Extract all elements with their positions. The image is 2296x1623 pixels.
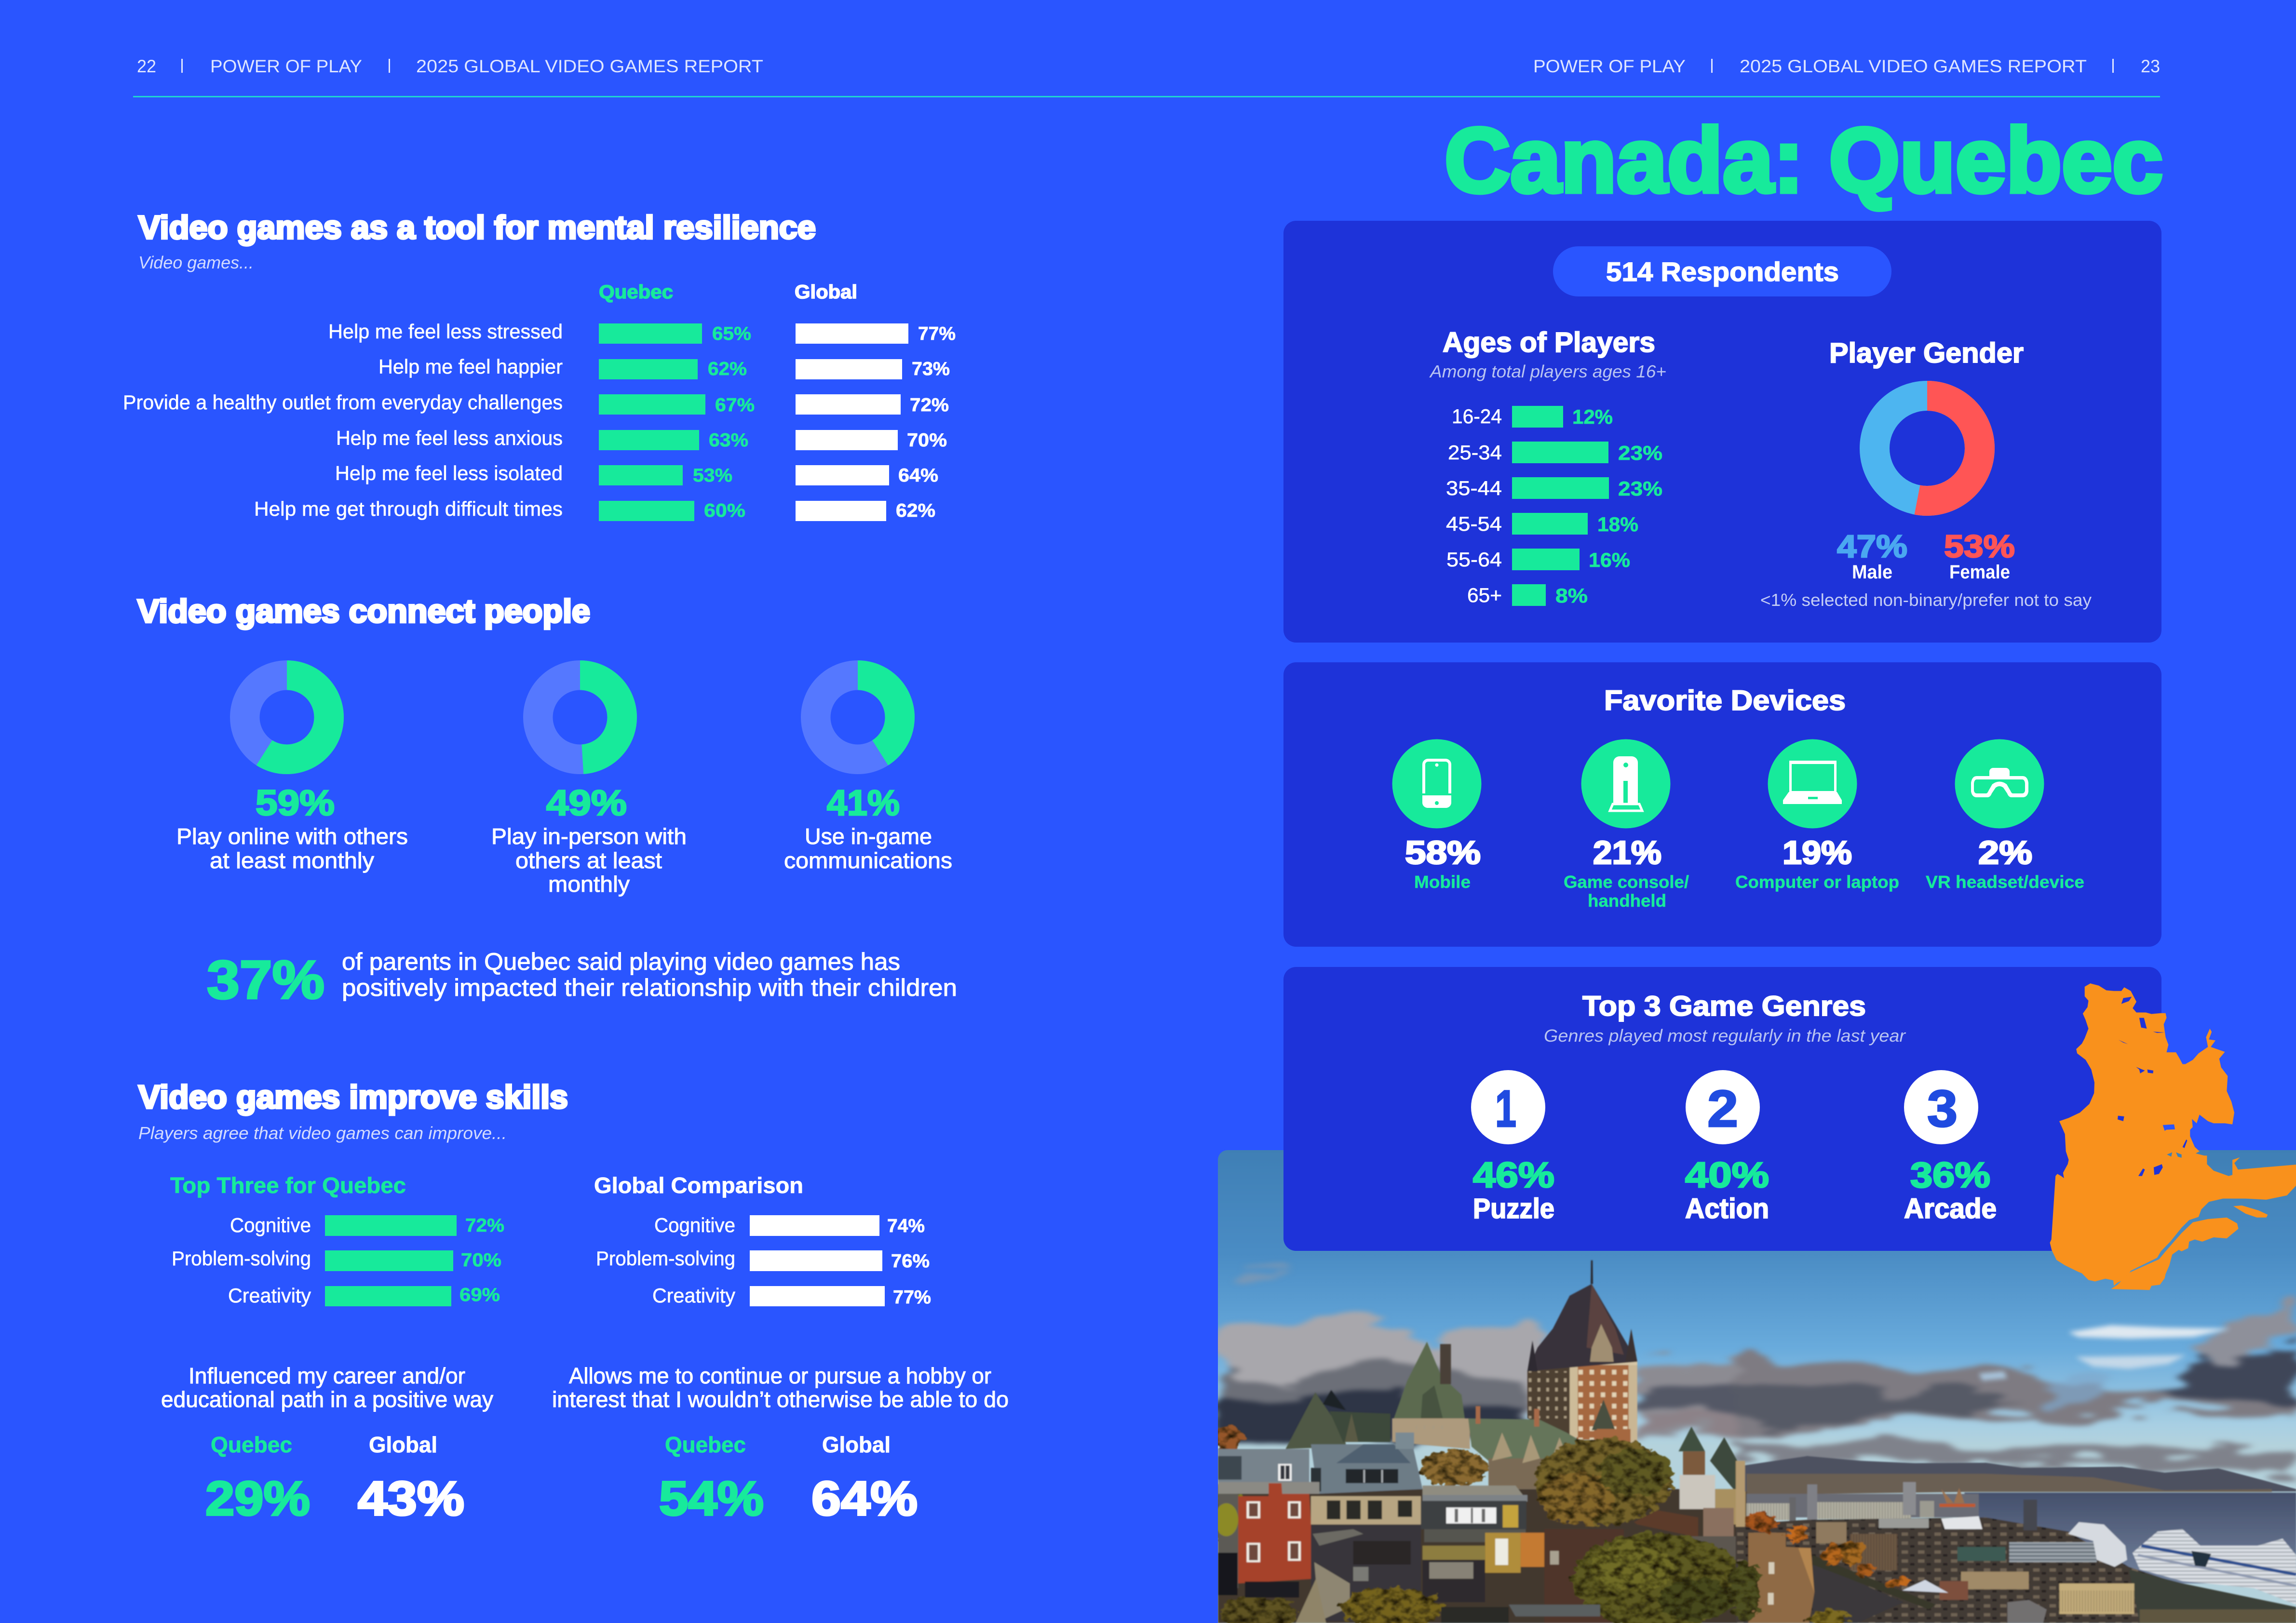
stat: console: Game console/ — [1564, 872, 1689, 892]
stat: hobby or interest: Quebec — [665, 1432, 746, 1457]
stat: career influence: Quebec — [211, 1432, 292, 1457]
chart: top three for Quebec: Top Three for Quebec — [170, 1173, 406, 1198]
stat: VR — [1926, 834, 2084, 892]
left part of the photo — [1209, 1261, 1748, 1623]
callout: 37% of parents: positively impacted their relationship with their children — [342, 974, 957, 1001]
bar chart: ages: 35-44 — [1446, 477, 1502, 499]
chart: global comparison: Global Comparison — [594, 1173, 803, 1198]
stat: console — [1564, 834, 1689, 911]
chart: global comparison: 74% — [887, 1216, 925, 1236]
row: less anxious: 70% — [907, 430, 947, 451]
heading: connect people: Video games connect people — [137, 593, 590, 630]
chart: top three for Quebec: 69% — [459, 1285, 500, 1305]
genre 1: puzzle: Puzzle — [1473, 1193, 1554, 1224]
icon: laptop — [1768, 739, 1857, 828]
stat: mobile: 58% — [1405, 834, 1481, 871]
right part of the photo — [1729, 1456, 2296, 1623]
row: less anxious — [336, 427, 947, 451]
stat: 41%: communications — [784, 848, 952, 873]
stat: career influence — [161, 1363, 493, 1526]
stat: hobby or interest: interest that I wouldn’t otherwise be able to do — [552, 1387, 1009, 1412]
genre 3: arcade: 3 — [1927, 1079, 1958, 1138]
genre 1: puzzle: 46% — [1473, 1155, 1554, 1195]
panel: respondents, ages and gender — [1283, 221, 2161, 643]
bar chart: ages: 8% — [1555, 584, 1588, 607]
row: happier: 73% — [912, 359, 950, 379]
header: right page: POWER OF PLAY — [1533, 56, 1686, 76]
genre 3: arcade: Arcade — [1904, 1193, 1997, 1224]
genre 2: action: Action — [1685, 1193, 1769, 1224]
row: less isolated: 64% — [898, 465, 938, 486]
stat: VR: VR headset/device — [1926, 872, 2084, 892]
stat: 41%: Use in-game — [805, 824, 932, 849]
callout: 37% of parents — [207, 948, 957, 1010]
stat: computer: Computer or laptop — [1735, 872, 1899, 892]
stat: 59%: 59% — [256, 783, 335, 823]
stat: hobby or interest — [552, 1363, 1009, 1526]
stat: career influence: educational path in a positive way — [161, 1387, 493, 1412]
chart: global comparison: Problem-solving — [596, 1247, 735, 1270]
stat: career influence: 29% — [205, 1472, 310, 1526]
header: right page: 23 — [2141, 56, 2160, 76]
row: happier: Help me feel happier — [378, 355, 563, 378]
donut: 59% play online — [245, 675, 329, 759]
icon: phone — [1392, 739, 1481, 828]
row: less stressed: 77% — [918, 323, 956, 344]
header: left page: 2025 GLOBAL VIDEO GAMES REPORT — [416, 56, 763, 76]
stat: 59% — [176, 783, 408, 873]
bar chart: ages: 23% — [1618, 442, 1662, 464]
heading: improve skills: Video games improve skills — [138, 1079, 568, 1115]
pill: 514 respondents — [1553, 246, 1891, 296]
row: less isolated: Help me feel less isolated — [335, 462, 563, 484]
note: genres played: Genres played most regularly in the last year — [1544, 1026, 1906, 1046]
header: right page: 2025 GLOBAL VIDEO GAMES REPORT — [1740, 56, 2087, 76]
photo: Quebec City skyline with Chateau Frontenac — [1209, 1150, 2296, 1623]
genre 2: action — [1685, 1070, 1769, 1224]
chart: global comparison — [594, 1173, 931, 1308]
header rule — [133, 96, 2160, 97]
panel: favorite devices — [1283, 662, 2161, 947]
bar chart: ages: 45-54 — [1446, 512, 1502, 535]
map: Quebec province in orange — [2050, 983, 2296, 1290]
stat: console: handheld — [1588, 891, 1666, 911]
stat: computer: 19% — [1783, 834, 1852, 871]
row: difficult times: Help me get through difficult times — [254, 497, 563, 520]
donut: 49% play in person — [538, 675, 622, 759]
genre 3: arcade — [1904, 1070, 1997, 1224]
heading: mental resilience: Video games as a tool for mental resilience — [138, 209, 816, 246]
bar chart: ages: 18% — [1597, 513, 1638, 536]
chart: top three for Quebec: Creativity — [228, 1284, 311, 1307]
chart: top three for Quebec: 70% — [461, 1250, 501, 1271]
icon: game console — [1581, 739, 1670, 828]
stat: career influence: Global — [369, 1432, 437, 1457]
row: less stressed — [328, 320, 956, 344]
stat: male: 47% — [1837, 528, 1907, 564]
icon: VR headset — [1955, 739, 2044, 828]
row: difficult times: 60% — [704, 500, 745, 521]
bar chart: ages: 65+ — [1467, 584, 1502, 606]
chart: top three for Quebec — [170, 1173, 504, 1307]
callout: 37% of parents: 37% — [207, 950, 324, 1010]
heading: ages of players: Ages of Players — [1443, 327, 1655, 358]
row: healthy outlet — [123, 391, 949, 416]
chart: global comparison: Creativity — [652, 1284, 735, 1307]
subheading: Players agree that video games can improve... — [138, 1123, 507, 1143]
panel: top 3 game genres — [1283, 967, 2161, 1251]
column header: Global: Global — [795, 282, 857, 303]
callout: 37% of parents: of parents in Quebec said playing video games has — [342, 948, 900, 975]
stat: career influence: Influenced my career and/or — [189, 1363, 465, 1388]
stat: hobby or interest: Global — [822, 1432, 891, 1457]
header: right page — [1533, 56, 2160, 76]
stat: 41% — [784, 783, 952, 873]
chart: global comparison: Cognitive — [654, 1214, 735, 1236]
column header: Quebec: Quebec — [599, 282, 673, 303]
genre 1: puzzle — [1471, 1070, 1554, 1224]
stat: hobby or interest: 64% — [811, 1472, 918, 1526]
row: healthy outlet: 67% — [715, 395, 755, 416]
stat: 49%: others at least — [515, 848, 662, 873]
section: connect people — [137, 593, 957, 1010]
bar chart: ages: 23% — [1618, 477, 1662, 500]
genre 2: action: 2 — [1707, 1079, 1738, 1138]
chart: top three for Quebec: 72% — [465, 1215, 504, 1236]
stat: mobile — [1405, 834, 1481, 892]
row: healthy outlet: Provide a healthy outlet from everyday challenges — [123, 391, 563, 414]
row: less anxious: Help me feel less anxious — [336, 427, 563, 449]
row: less stressed: 65% — [712, 323, 751, 344]
header: left page: 22 — [137, 56, 156, 76]
genre 2: action: 40% — [1685, 1155, 1769, 1195]
bar chart: ages: 12% — [1572, 405, 1613, 428]
donut: gender — [1875, 396, 1980, 501]
stat: female: 53% — [1944, 528, 2015, 564]
row: less stressed: Help me feel less stressed — [328, 320, 563, 343]
stat: hobby or interest: 54% — [659, 1472, 764, 1526]
bar chart: ages: 25-34 — [1448, 441, 1502, 464]
stat: male: Male — [1852, 562, 1892, 583]
row: happier: 62% — [708, 359, 747, 379]
stat: hobby or interest: Allows me to continue or pursue a hobby or — [569, 1363, 991, 1388]
bar chart: ages: 55-64 — [1446, 548, 1502, 571]
row: healthy outlet: 72% — [910, 395, 949, 416]
chart: global comparison: 76% — [891, 1251, 930, 1272]
stat: career influence: 43% — [358, 1472, 464, 1526]
heading: top 3 game genres: Top 3 Game Genres — [1582, 991, 1866, 1022]
row: less isolated — [335, 462, 938, 486]
bar chart: ages: 16-24 — [1452, 405, 1502, 428]
heading: player gender: Player Gender — [1829, 337, 2024, 369]
stat: 59%: at least monthly — [210, 848, 374, 873]
stat: female: Female — [1949, 562, 2010, 583]
section: mental resilience — [123, 209, 956, 521]
pill: 514 respondents: 514 Respondents — [1606, 256, 1839, 287]
stat: console: 21% — [1593, 834, 1661, 871]
stat: VR: 2% — [1978, 834, 2032, 871]
stat: computer — [1735, 834, 1899, 892]
row: difficult times: 62% — [896, 500, 935, 521]
stat: 41%: 41% — [827, 783, 900, 823]
section: improve skills — [138, 1079, 1009, 1526]
stat: male — [1837, 528, 1907, 583]
header: left page: POWER OF PLAY — [210, 56, 362, 76]
genre 3: arcade: 36% — [1910, 1155, 1990, 1195]
subheading: Video games... — [138, 253, 254, 272]
chart: top three for Quebec: Cognitive — [230, 1214, 311, 1236]
row: less anxious: 63% — [709, 430, 748, 451]
stat: female — [1944, 528, 2015, 583]
row: happier — [378, 355, 950, 379]
stat: 49%: monthly — [548, 872, 630, 897]
chart: top three for Quebec: Problem-solving — [172, 1247, 311, 1270]
chart: global comparison: 77% — [893, 1287, 931, 1308]
bar chart: ages: 16% — [1589, 549, 1630, 571]
donut: 41% in-game communications — [816, 675, 900, 759]
stat: 49% — [491, 783, 687, 897]
row: less isolated: 53% — [693, 465, 732, 486]
title: Canada: Quebec — [1445, 109, 2163, 212]
genre 1: puzzle: 1 — [1495, 1079, 1516, 1138]
stat: 59%: Play online with others — [176, 824, 408, 849]
stat: 49%: 49% — [546, 783, 627, 823]
stat: 49%: Play in-person with — [491, 824, 687, 849]
stat: mobile: Mobile — [1414, 872, 1471, 892]
note: among total players: Among total players ages 16+ — [1429, 362, 1666, 381]
header: left page — [137, 56, 763, 76]
bar chart: ages — [1446, 405, 1662, 607]
row: difficult times — [254, 497, 935, 521]
heading: favorite devices: Favorite Devices — [1604, 685, 1846, 716]
note: non-binary: <1% selected non-binary/prefer not to say — [1760, 590, 2092, 610]
